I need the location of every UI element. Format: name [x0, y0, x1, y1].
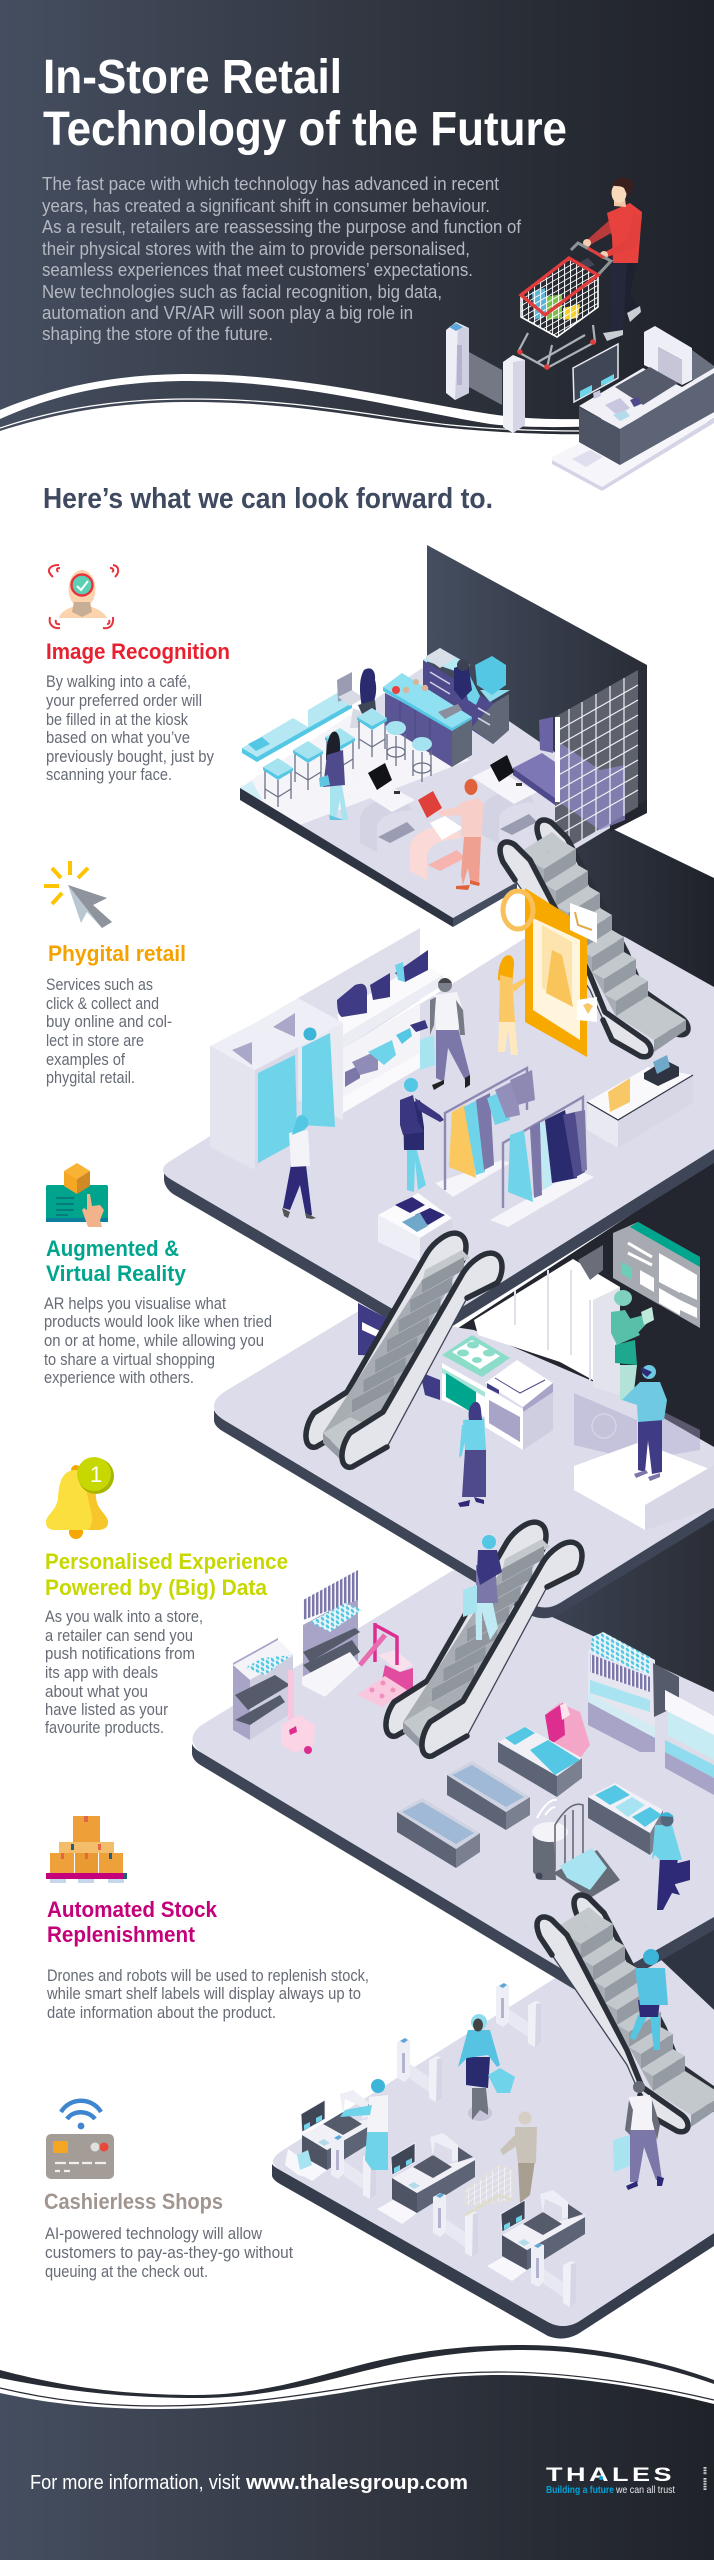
icon: man with bag	[613, 2081, 664, 2190]
icon: woman in long skirt	[458, 1402, 486, 1507]
section: phygital retail	[44, 861, 186, 1087]
title	[43, 51, 567, 156]
store floor: phygital level base	[163, 802, 714, 1342]
header background	[0, 0, 714, 434]
body text	[46, 976, 172, 1087]
icon: wall display shelving	[588, 1632, 714, 1795]
icon: folded clothes table	[378, 1193, 452, 1262]
heading: Phygital retail	[48, 941, 186, 966]
body text: phygital retail.	[46, 1069, 135, 1087]
icon: escalator AR to data	[386, 1522, 582, 1756]
icon: woman on escalator	[630, 1949, 668, 2050]
Thales logo: THALES	[546, 2464, 675, 2486]
icon: man with ivory trolley	[465, 2112, 537, 2215]
heading: Cashierless Shops	[44, 2189, 223, 2214]
body text	[46, 673, 215, 784]
icon: sales counter with register	[587, 1055, 693, 1148]
heading: Augmented &	[46, 1236, 179, 1261]
footer background	[0, 2345, 714, 2560]
body text: on or at home, while allowing you	[44, 1332, 264, 1350]
intro text: The fast pace with which technology has advanced in recent	[42, 174, 499, 194]
heading: Image Recognition	[46, 639, 230, 664]
icon: table with robot	[498, 1703, 590, 1797]
body text	[45, 1608, 203, 1737]
icon: stools	[263, 708, 432, 807]
Thales logo: we can all trust	[615, 2484, 675, 2496]
body text: queuing at the check out.	[45, 2263, 208, 2281]
icon: man with briefcase	[652, 1812, 690, 1910]
icon: contactless card	[46, 2101, 114, 2179]
heading: Automated Stock	[47, 1897, 218, 1922]
icon: bench and laptop customer	[242, 668, 376, 762]
intro text: As a result, retailers are reassessing the purpose and function of	[42, 217, 522, 237]
section: cashierless shops	[44, 2101, 293, 2281]
section: augmented and virtual reality	[44, 1163, 272, 1387]
title: In-Store Retail	[43, 51, 342, 104]
body text: lect in store are	[46, 1032, 144, 1050]
panel: AR and VR level	[358, 1222, 714, 1530]
icon: cooker	[442, 1335, 510, 1417]
body text: buy online and col-	[46, 1013, 172, 1031]
body text: By walking into a café,	[46, 673, 191, 691]
icon: right shelf	[302, 1570, 362, 1697]
body text: products would look like when tried	[44, 1313, 272, 1331]
store floor: AR level base	[214, 1160, 714, 1618]
heading: Personalised Experience	[45, 1549, 288, 1574]
back wall	[427, 545, 647, 813]
body text: scanning your face.	[46, 766, 172, 784]
cafe floor	[240, 665, 647, 927]
heading	[46, 1236, 187, 1286]
icon: pink stocking robot	[357, 1623, 413, 1707]
icon: bags and shoes on shelves	[337, 950, 428, 1087]
store floor: data level base	[192, 1515, 714, 2000]
intro text: automation and VR/AR will soon play a big role in	[42, 303, 413, 323]
icon: clothes racks	[435, 1068, 594, 1227]
body text: to share a virtual shopping	[44, 1351, 215, 1369]
body text: favourite products.	[45, 1719, 164, 1737]
icon: man with shopping bag	[420, 978, 470, 1090]
icon: woman with dark hair	[319, 731, 348, 820]
body text	[45, 2225, 293, 2281]
section: image recognition	[46, 565, 230, 784]
footer link text: For more information, visit	[30, 2472, 240, 2494]
Thales logo: Building a future	[546, 2484, 614, 2496]
icon: phone display	[503, 888, 597, 1057]
icon: checkout gates	[397, 1983, 541, 2102]
body text: date information about the product.	[47, 2004, 276, 2022]
body text	[46, 1967, 369, 2022]
icon: cafe counter	[383, 673, 472, 767]
panel: big data level	[233, 1570, 714, 1910]
icon: man pushing cart	[517, 177, 642, 370]
illustration: shopper with cart at self-checkout	[446, 177, 714, 491]
body text: previously bought, just by	[46, 748, 215, 766]
panel: cafe level	[240, 545, 647, 927]
icon: VR customer and hologram	[574, 1365, 714, 1530]
section: personalised experience	[45, 1457, 288, 1737]
heading: Replenishment	[47, 1922, 196, 1947]
body text: experience with others.	[44, 1369, 194, 1387]
intro text: shaping the store of the future.	[42, 324, 273, 344]
footer link text: www.thalesgroup.com	[245, 2472, 468, 2494]
icon: escalator cafe to phygital	[499, 820, 688, 1057]
icon: gate	[446, 322, 525, 433]
icon: face scan	[49, 565, 118, 628]
intro text: years, has created a significant shift in consumer behaviour.	[42, 196, 490, 216]
title: Technology of the Future	[43, 103, 567, 156]
icon: notification bell: 1	[90, 1462, 102, 1487]
body text: based on what you’ve	[46, 729, 190, 747]
icon: cursor click	[44, 861, 112, 928]
body text: a retailer can send you	[45, 1627, 193, 1645]
body text: have listed as your	[45, 1701, 168, 1719]
body text: push notifications from	[45, 1645, 195, 1663]
heading: Powered by (Big) Data	[45, 1575, 268, 1600]
body text: while smart shelf labels will display always up to	[46, 1985, 361, 2003]
icon: woman with basket	[458, 2014, 515, 2121]
icon: escalator phygital to AR	[306, 1233, 502, 1467]
icon: gates front	[331, 2135, 576, 2307]
icon: woman on escalator with bag	[463, 1535, 502, 1640]
Thales logo	[546, 2464, 675, 2496]
icon: man at checkout	[340, 2079, 388, 2170]
icon: table with goods	[588, 1783, 663, 1855]
section: automated stock replenishment	[46, 1816, 369, 2022]
body text: Drones and robots will be used to replenish stock,	[47, 1967, 369, 1985]
reference mark	[704, 2467, 706, 2491]
intro text: their physical stores with the aim to provide personalised,	[42, 239, 470, 259]
body text: customers to pay-as-they-go without	[45, 2244, 293, 2262]
icon: washing machine	[485, 1360, 553, 1450]
body text: about what you	[45, 1683, 148, 1701]
icon: woman touching display	[498, 955, 530, 1055]
icon: customer by curtain	[282, 1115, 316, 1219]
body text: your preferred order will	[46, 692, 202, 710]
icon: escalator data to checkout	[536, 1895, 714, 2132]
icon: pink scanning robot	[281, 1670, 315, 1754]
icon: self-checkout counter	[552, 326, 714, 491]
icon: left shelf	[233, 1638, 294, 1740]
icon: dressing rooms and shelves	[210, 928, 443, 1170]
icon: AR billboard	[613, 1222, 700, 1328]
body text: be filled in at the kiosk	[46, 711, 189, 729]
intro text: New technologies such as facial recognition, big data,	[42, 282, 442, 302]
body text: Services such as	[46, 976, 153, 994]
body text: click & collect and	[46, 995, 159, 1013]
intro text	[42, 174, 522, 344]
icon: sofa	[513, 717, 555, 805]
icon: purple shelf	[358, 1303, 440, 1400]
heading: Virtual Reality	[46, 1261, 187, 1286]
panel: phygital retail level	[210, 928, 693, 1262]
icon: AGV trolley	[532, 1800, 620, 1898]
body text: As you walk into a store,	[45, 1608, 203, 1626]
escalators	[499, 820, 688, 1057]
body text: AI-powered technology will allow	[45, 2225, 262, 2243]
icon: AR card and cube	[46, 1163, 108, 1227]
body text: examples of	[46, 1051, 125, 1069]
icon: saleswoman	[400, 1078, 444, 1192]
heading	[45, 1549, 288, 1600]
heading: what to look forward to: Here’s what we can look forward to.	[43, 483, 493, 515]
icon: glazed window	[555, 670, 638, 855]
intro text: seamless experiences that meet customers’ expectations.	[42, 260, 473, 280]
heading	[47, 1897, 218, 1947]
icon: freezers	[397, 1761, 530, 1868]
icon: kiosks	[350, 755, 537, 880]
body text: its app with deals	[45, 1664, 158, 1682]
body text	[44, 1295, 272, 1387]
panel: cashierless level	[285, 1983, 585, 2307]
footer link text	[30, 2472, 468, 2494]
icon: white wall and fridges	[474, 1245, 620, 1395]
icon: mannequin and tablet	[611, 1290, 654, 1400]
store floor: checkout level base	[272, 1910, 714, 2339]
icon: stacked boxes on pallet	[46, 1816, 127, 1883]
icon: checkout counters	[285, 2090, 585, 2281]
icon: back counter with coffee machine	[423, 648, 510, 744]
icon: notification bell	[46, 1457, 114, 1539]
body text: AR helps you visualise what	[44, 1295, 226, 1313]
icon: man at kiosk	[418, 779, 483, 890]
